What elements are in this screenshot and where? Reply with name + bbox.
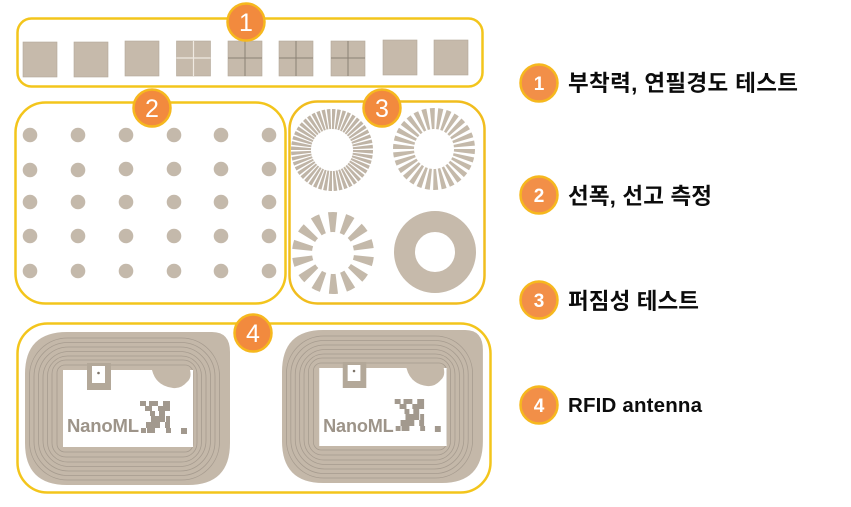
ring: 14 wedges [298,218,368,288]
antenna left: NanoML [67,415,139,436]
ring: solid [404,222,466,282]
ring: 48 spokes [301,119,363,181]
dot grid [23,128,276,278]
ring: 30 spokes [404,118,464,180]
panel 4: RFID antennas [18,324,490,492]
antenna right [282,330,483,483]
badge 4 on panel: 4 [246,320,260,348]
badge 2 on panel: 2 [145,95,159,123]
panel 3: spreading test rings [290,102,484,304]
solid and cross-cut squares [23,40,468,77]
legend item 2 [520,176,712,214]
panel 2: line width and line height measurement dots [16,102,286,304]
badge 1 on panel: 1 [239,9,253,37]
legend item 4: 4 [534,396,545,417]
panel 1: adhesion and pencil hardness samples [18,18,482,86]
antenna right: NanoML [323,415,394,436]
legend item 2: 2 [534,186,544,207]
legend item 1: 부착력, 연필경도 테스트 [568,71,798,96]
legend item 1 [520,64,798,102]
badge 4 on panel [234,314,272,352]
legend item 3 [520,282,699,318]
legend item 1: 1 [534,74,545,95]
badge 3 on panel: 3 [375,95,389,123]
legend item 4 [520,386,703,424]
legend item 3: 퍼짐성 테스트 [568,289,699,314]
badge 3 on panel [364,90,400,126]
legend item 4: RFID antenna [568,394,703,417]
antenna left [25,332,230,485]
legend item 3: 3 [534,291,544,312]
legend item 2: 선폭, 선고 측정 [568,184,712,209]
badge 2 on panel [134,90,170,126]
badge 1 on panel [228,4,264,40]
